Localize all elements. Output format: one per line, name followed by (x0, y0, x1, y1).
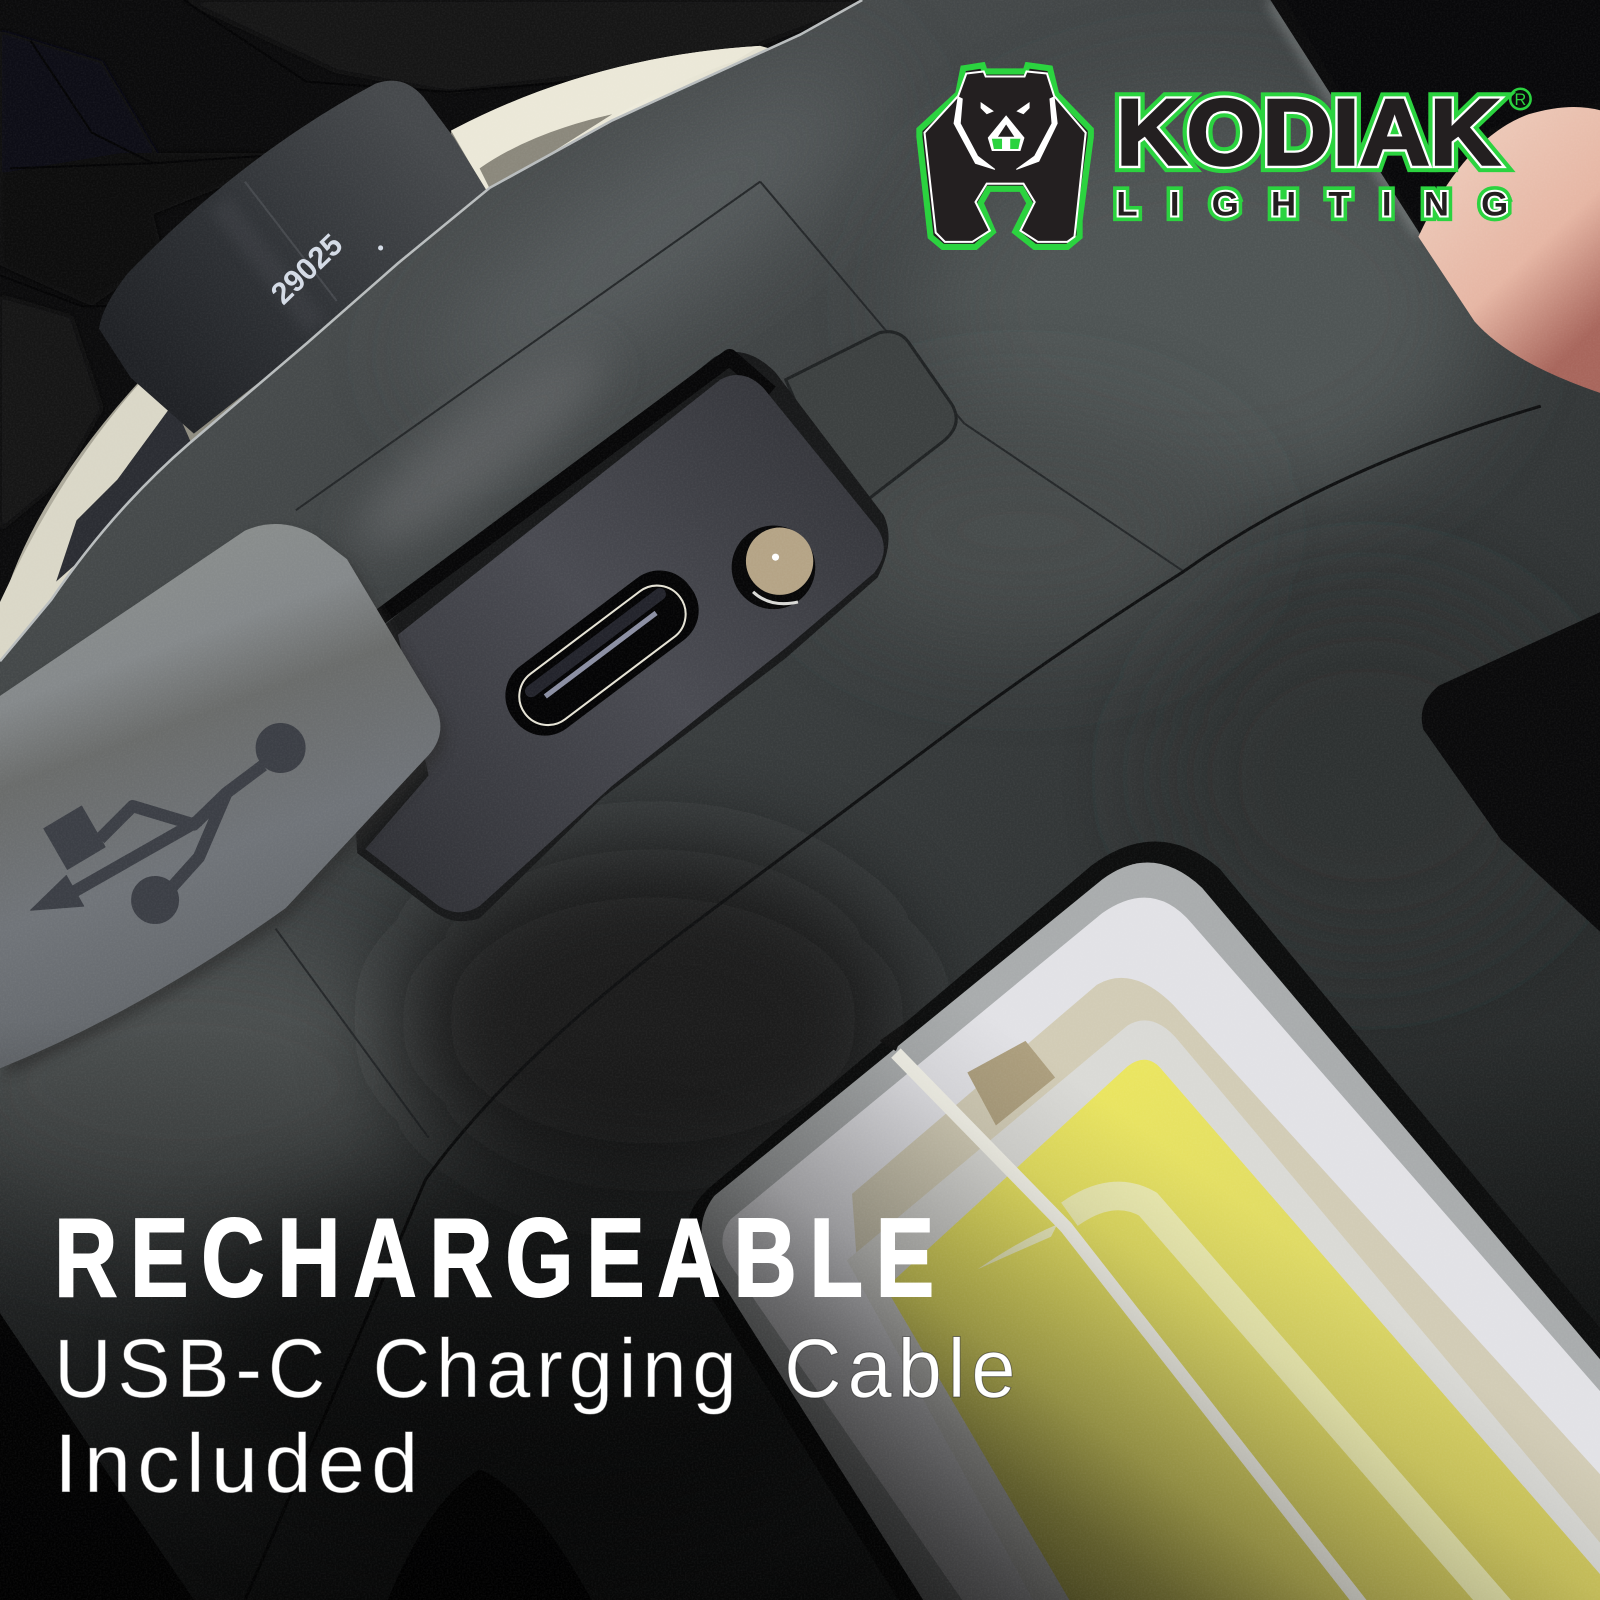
headline: RECHARGEABLE: RECHARGEABLE (54, 1195, 947, 1320)
USB trident icon (31, 723, 305, 923)
logo: KODIAK wordmark: KODIAK (1116, 79, 1500, 184)
logo: registered mark (1510, 89, 1531, 109)
logo: bear mark (919, 65, 1091, 247)
logo: LIGHTING wordmark: LIGHTING (1116, 185, 1508, 223)
COB work light panel (686, 842, 1600, 1600)
logo: KODIAK wordmark: KODIAK (1116, 79, 1500, 184)
cap with number 29025 (99, 81, 492, 434)
logo: LIGHTING wordmark: LIGHTING (1116, 185, 1508, 223)
subheading: USB-C Charging Cable Included (54, 1321, 1021, 1510)
lower body darkening (0, 1020, 1600, 1600)
metal key ring (0, 46, 816, 714)
finger holding the lantern (1418, 107, 1600, 393)
USB-C port (491, 556, 713, 750)
subheading: USB-C Charging Cable Included: Included (54, 1416, 424, 1510)
raised tab outline beside port (786, 332, 956, 500)
port plate with recess (347, 352, 889, 921)
logo: KODIAK wordmark: KODIAK (1116, 79, 1500, 184)
Kodiak Lighting logo (919, 65, 1531, 247)
indicator LED (732, 526, 815, 609)
rubber port cover with USB symbol (0, 524, 447, 1077)
number 29025: 29025 (265, 227, 349, 311)
subheading: USB-C Charging Cable Included: USB-C Charging Cable (54, 1321, 1021, 1415)
window cut-out on right (1422, 612, 1600, 932)
logo: registered mark: R (1515, 91, 1527, 109)
